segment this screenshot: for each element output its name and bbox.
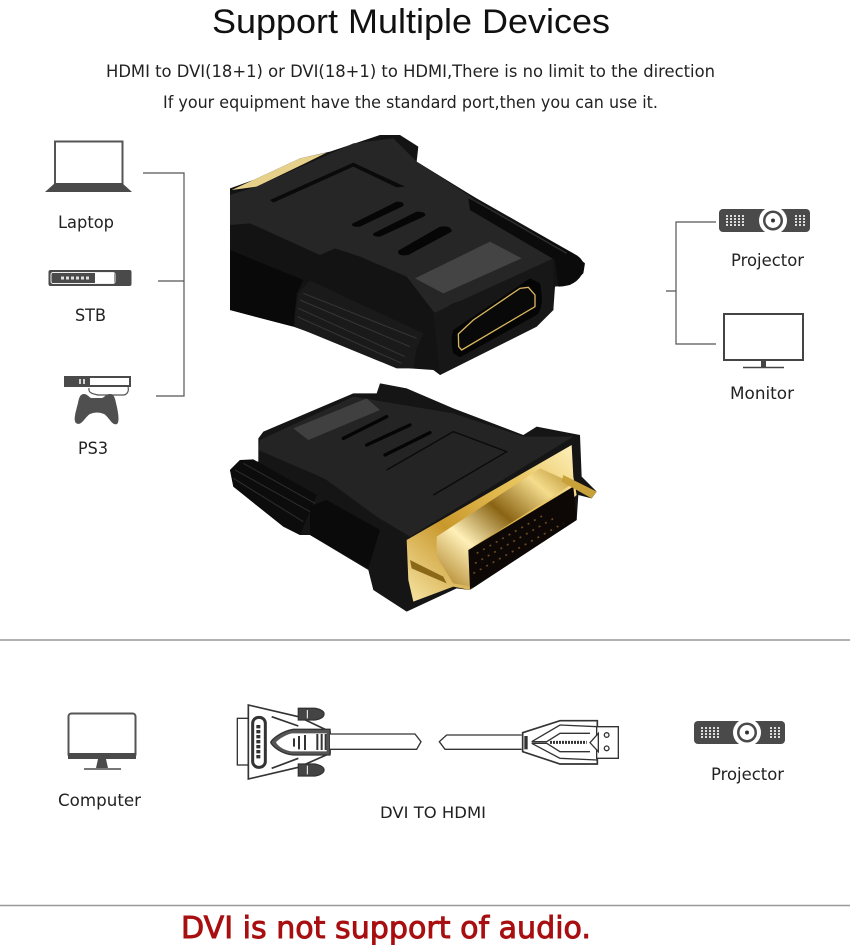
photo: DVI male end of adapter: [230, 383, 597, 612]
connector: display bracket: [666, 222, 716, 344]
icon: laptop: [45, 142, 132, 192]
label: projector: Projector: [731, 251, 804, 271]
connector: source bracket: [143, 173, 184, 396]
diagram: DVI to HDMI cable: [237, 705, 618, 779]
label: monitor: Monitor: [730, 384, 794, 404]
label: projector: Projector: [711, 765, 784, 785]
divider: section top: [0, 639, 850, 641]
label: laptop: Laptop: [58, 213, 114, 233]
warning note: DVI is not support of audio.: [181, 911, 591, 946]
panel: display devices: [666, 206, 810, 404]
label: DVI to HDMI: DVI TO HDMI: [380, 803, 486, 822]
label: computer: Computer: [58, 791, 141, 811]
label: STB: STB: [75, 306, 106, 326]
subtitle: If your equipment have the standard port,then you can use it.: [163, 93, 658, 113]
icon: monitor: [724, 314, 803, 368]
title: Support Multiple Devices: [212, 3, 610, 41]
icon: projector: [719, 206, 810, 234]
panel: DVI to HDMI connection: [58, 705, 785, 822]
divider: section bottom: [0, 904, 850, 906]
subtitle: HDMI to DVI(18+1) or DVI(18+1) to HDMI,There is no limit to the direction: [106, 62, 715, 82]
photo: HDMI female end of adapter: [230, 135, 585, 375]
icon: projector: [694, 718, 785, 746]
icon: PS3 console and gamepad: [64, 376, 131, 424]
icon: computer: [68, 714, 136, 769]
label: PS3: PS3: [78, 439, 108, 459]
panel: source devices: [45, 142, 184, 459]
icon: set-top box: [48, 270, 132, 286]
subtitle: [106, 62, 715, 113]
